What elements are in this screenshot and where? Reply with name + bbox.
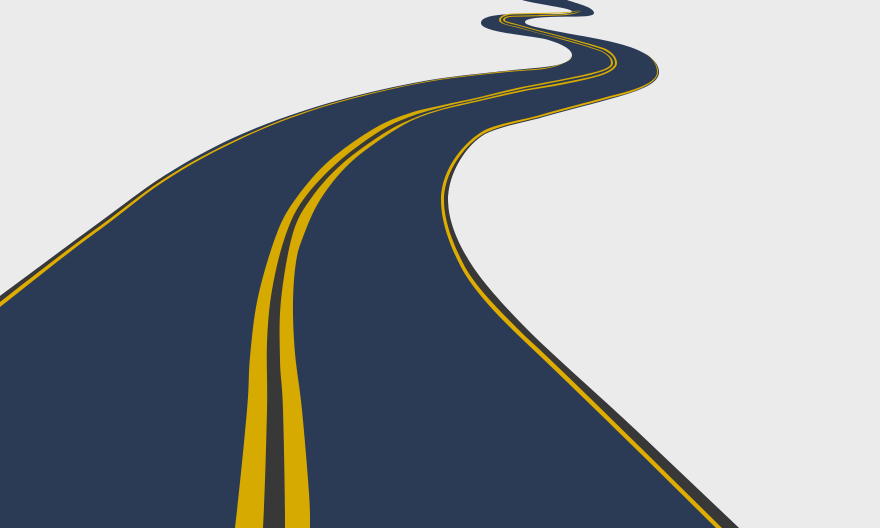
right edge line (441, 50, 722, 528)
centre line: right yellow (280, 10, 617, 528)
centre line: left yellow (235, 10, 613, 528)
left shoulder (0, 174, 167, 302)
left edge line (0, 55, 571, 307)
right shoulder (444, 117, 739, 528)
centre gap between double lines (263, 116, 418, 528)
